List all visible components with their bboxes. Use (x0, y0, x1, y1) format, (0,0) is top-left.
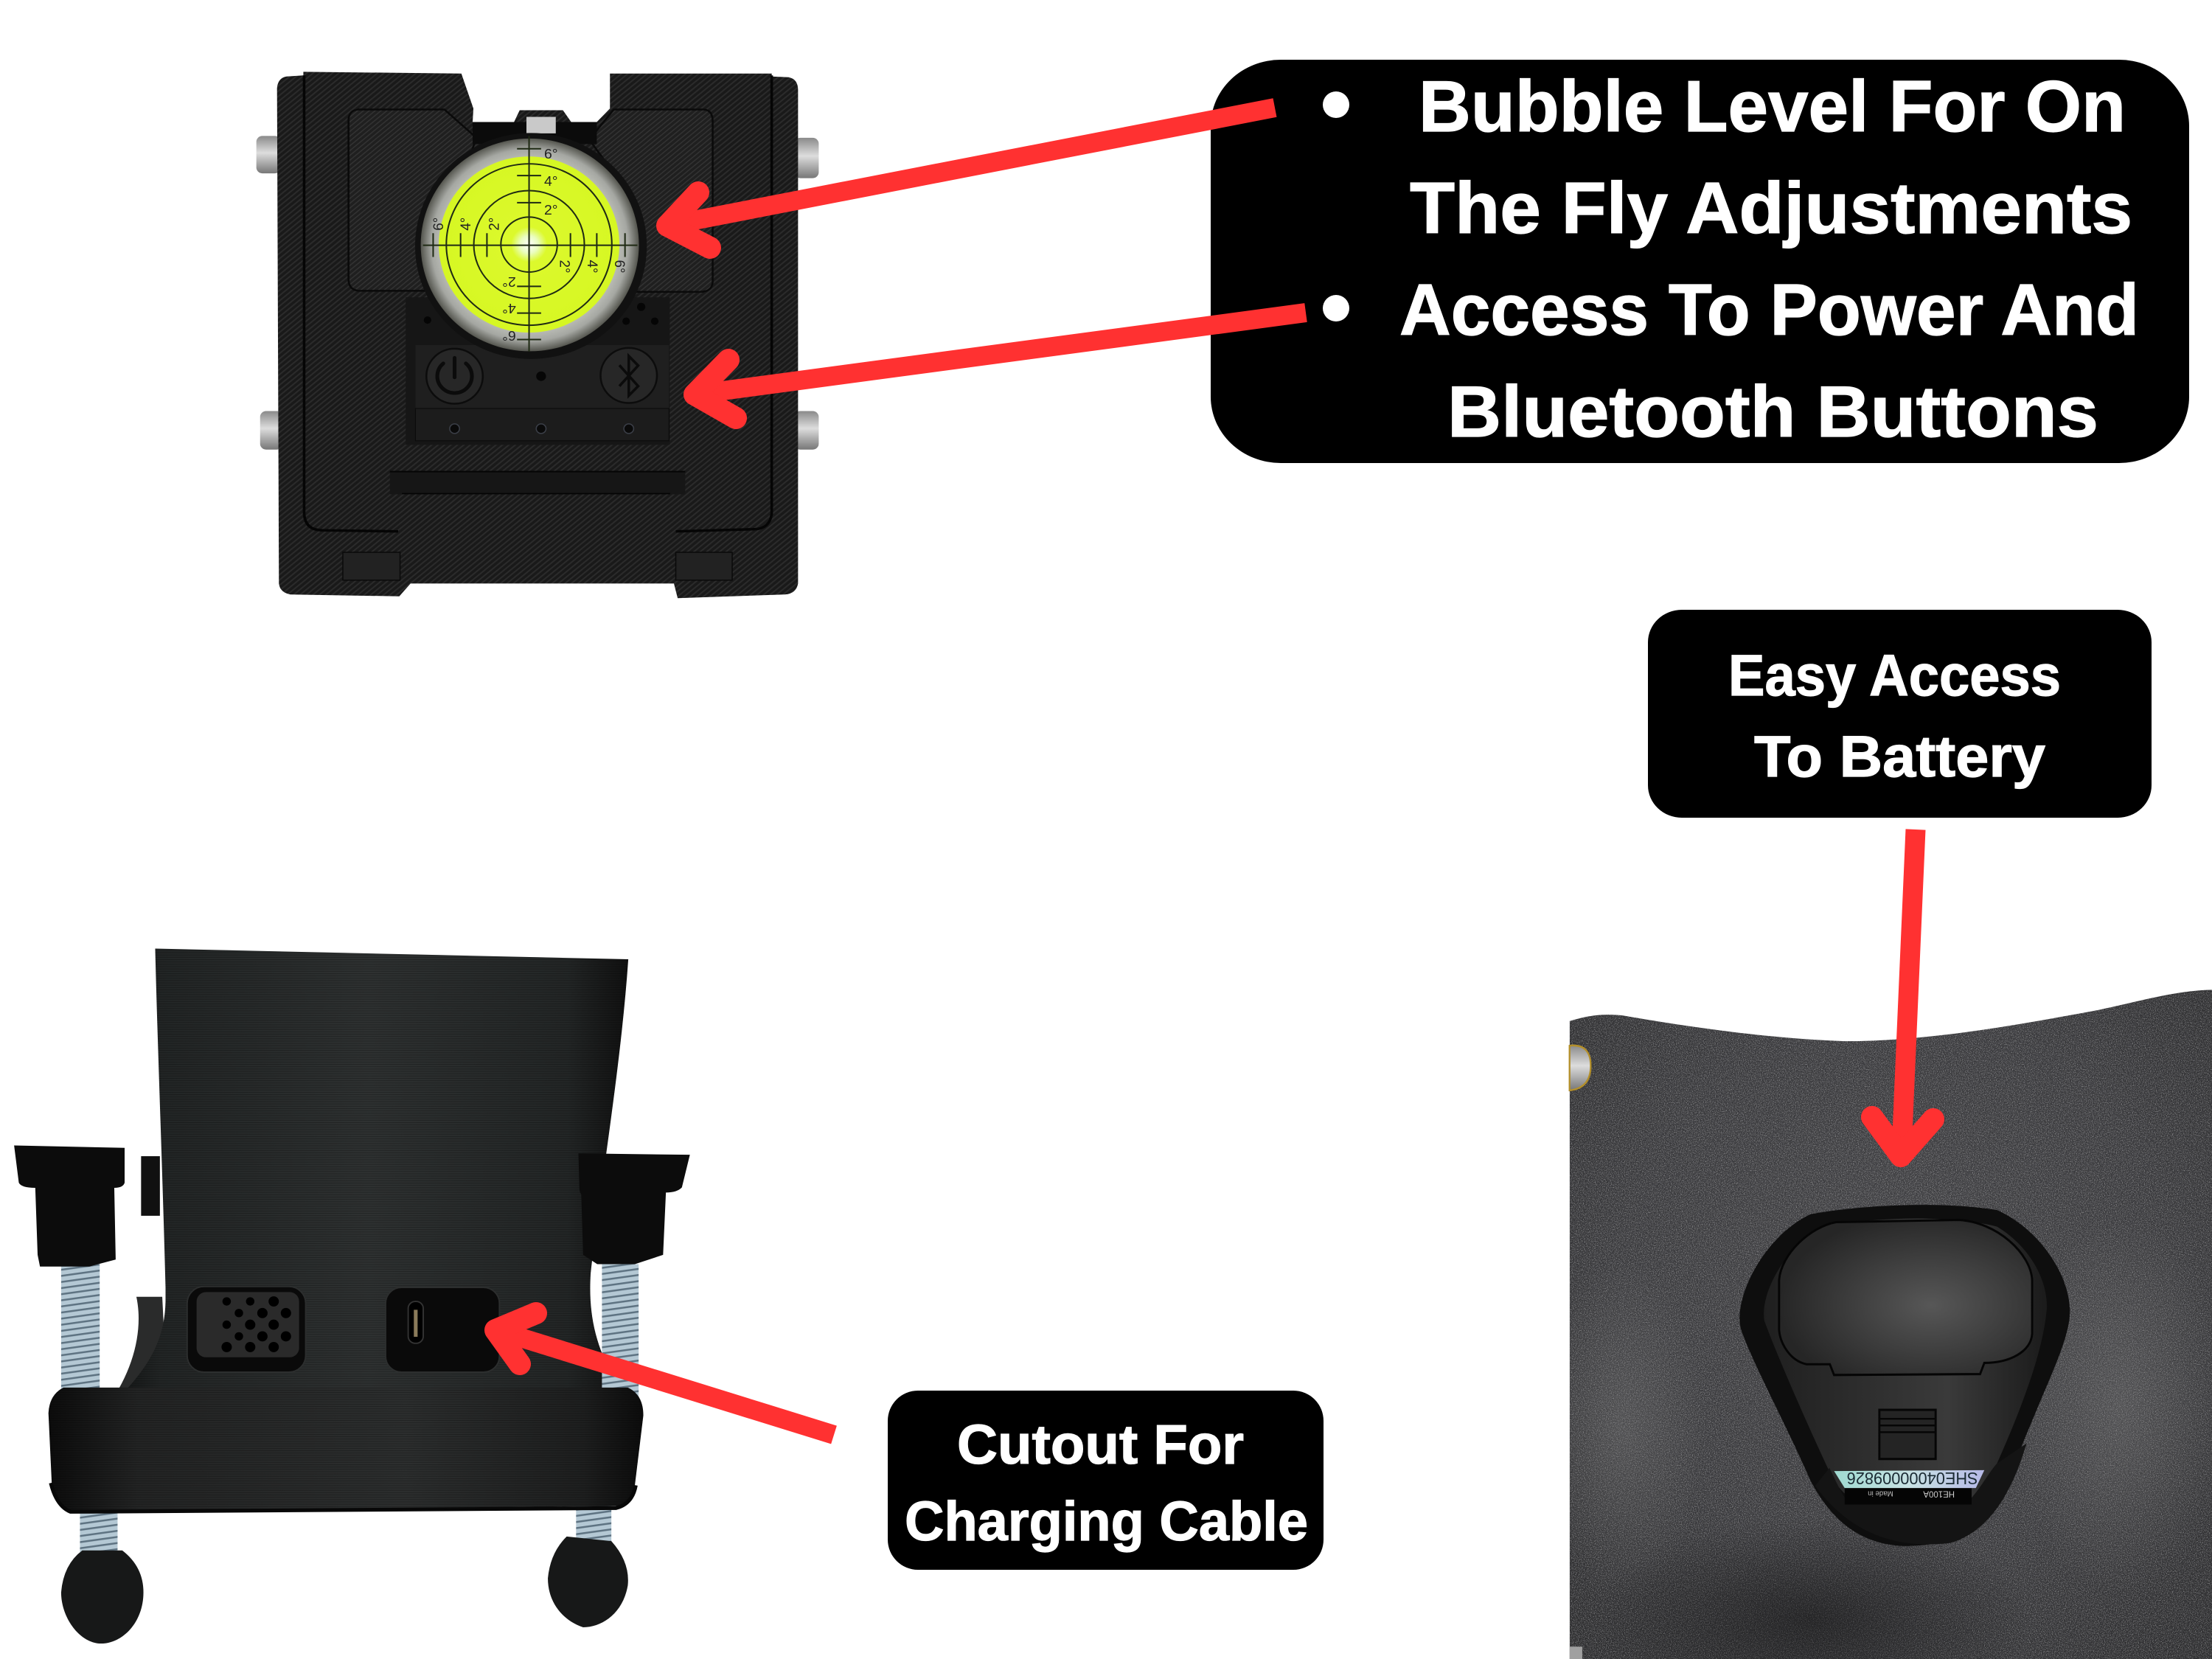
battery recess (1739, 1205, 2070, 1546)
bullet: power and bluetooth (1323, 295, 1349, 321)
curved side rail (106, 1297, 164, 1408)
base (49, 1388, 644, 1512)
level scale labels: 6° (431, 218, 447, 231)
callout: cutout for charging cable (888, 1391, 1324, 1570)
lower lip of recess (1815, 1444, 2027, 1545)
text block: buttons feature: Access To Power And (1399, 269, 2139, 350)
arrow: to charging cutout (495, 1313, 834, 1435)
top clip (473, 117, 597, 144)
textured shell (1536, 985, 2212, 1659)
callout: cutout for charging cable: Charging Cable (905, 1490, 1308, 1552)
icon: bubble level (415, 133, 647, 359)
icon: right knob (578, 1153, 690, 1265)
battery latch (1879, 1410, 1935, 1459)
raised plate: right (589, 110, 713, 292)
level scale labels: 4° (544, 174, 557, 189)
raised plate: left (349, 110, 476, 291)
level scale labels: 2° (556, 260, 572, 274)
panel: top view of device with bubble level (257, 72, 818, 598)
text block: buttons feature: Bluetooth Buttons (1447, 371, 2098, 452)
level scale labels: 2° (544, 203, 557, 218)
serial number label: HE100A (1923, 1489, 1955, 1500)
battery face (1764, 1219, 2047, 1512)
level scale labels (431, 147, 627, 343)
arrow: to battery (1872, 830, 1933, 1156)
callout: easy access to battery: Easy Access (1728, 642, 2061, 708)
level scale labels: 6° (611, 260, 627, 274)
icon: rubber feet (61, 1537, 628, 1644)
level scale labels: 6° (502, 327, 516, 343)
raised frame outline (304, 75, 772, 532)
charging cutout with USB-C port (386, 1287, 499, 1372)
level scale labels: 2° (502, 274, 516, 289)
icon: bluetooth button (600, 348, 657, 403)
serial number label: SHE04000009826 (1847, 1469, 1978, 1487)
upper bolts (61, 1265, 639, 1413)
battery cover (1779, 1220, 2032, 1375)
rear clip (141, 1156, 160, 1216)
serial number label: Made in (1868, 1489, 1893, 1498)
panel: front view of device with charging cutout (14, 949, 690, 1644)
arrow: to power and bluetooth buttons (695, 313, 1306, 418)
lower bolts (80, 1504, 611, 1569)
callout: easy access to battery (1648, 610, 2152, 818)
panel: underside with battery access (1536, 985, 2212, 1659)
icon: bolts (1570, 1046, 1590, 1659)
callout: easy access to battery: To Battery (1754, 723, 2045, 789)
tower body (108, 949, 630, 1408)
lower tab (343, 472, 732, 580)
arrow: to bubble level (667, 108, 1275, 248)
callout: cutout for charging cable: Cutout For (957, 1413, 1244, 1475)
callout: bubble level and buttons (1211, 60, 2189, 463)
icon: left knob (14, 1146, 125, 1267)
device body (277, 72, 798, 598)
icon: thumb screws (257, 136, 818, 450)
level scale labels: 4° (459, 218, 474, 231)
level scale labels: 4° (584, 260, 599, 274)
level scale labels: 2° (487, 218, 503, 231)
level scale labels: 6° (544, 147, 557, 162)
button window (406, 297, 669, 445)
level scale labels: 4° (502, 300, 516, 316)
text block: bubble level feature: The Fly Adjustments (1410, 167, 2132, 248)
bullet: bubble level (1323, 91, 1349, 118)
text block: buttons feature (1399, 269, 2139, 452)
text block: bubble level feature (1410, 66, 2132, 248)
icon: power button (426, 349, 483, 404)
speaker cutout (187, 1287, 306, 1372)
text block: bubble level feature: Bubble Level For On (1419, 66, 2126, 147)
serial number label (1834, 1469, 1984, 1505)
